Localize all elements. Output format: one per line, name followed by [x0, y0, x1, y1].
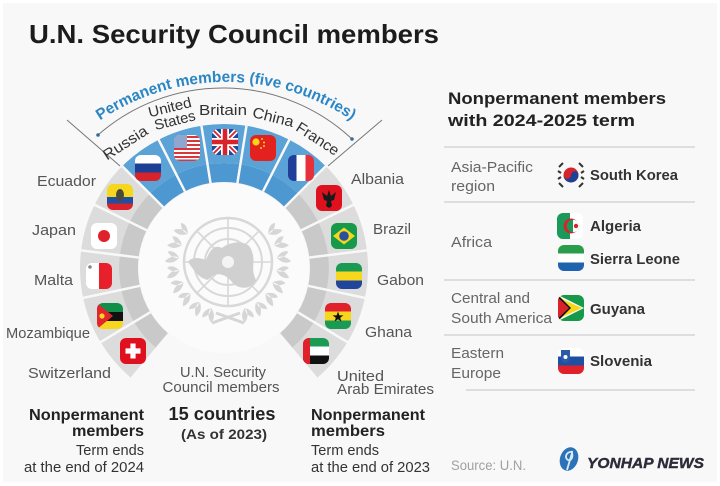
heading: table heading: Nonpermanent members: [448, 89, 666, 108]
region labels: Central and: [451, 290, 530, 307]
region labels: Asia-Pacific: [451, 159, 534, 176]
arrow: permanent members arc: [96, 88, 354, 141]
text block: right term note: Nonpermanent: [311, 407, 426, 424]
region labels: Eastern: [451, 345, 504, 362]
flag: Guyana: [558, 295, 584, 321]
label: China: China: [251, 104, 296, 131]
flag: Gabon: [336, 263, 362, 290]
permanent wedges: China: [229, 124, 290, 194]
label: France: France: [293, 119, 342, 159]
text block: left term note: members: [72, 423, 144, 440]
flag: Brazil: [331, 223, 357, 249]
labels: left nonpermanent countries: Japan: [32, 222, 76, 239]
panel: nonpermanent members table: [444, 89, 695, 390]
title: U.N. Security Council members: [29, 19, 439, 49]
text block: right term note: members: [311, 423, 385, 440]
permanent wedges: Britain: [201, 124, 247, 183]
flag: South Korea: [558, 163, 584, 187]
flag: China: [250, 135, 276, 161]
flag: Russia: [135, 155, 161, 182]
logo: Yonhap News: [557, 445, 704, 473]
heading: permanent members: Permanent members (five countries): [95, 70, 356, 122]
nonpermanent wedges: right group: [273, 165, 369, 380]
region labels: Africa: [451, 234, 493, 251]
source note: Source: U.N.: [451, 458, 526, 473]
text block: left term note: Nonpermanent: [29, 407, 145, 424]
country names: Slovenia: [590, 353, 653, 370]
country names: South Korea: [590, 167, 679, 184]
flag: Ecuador: [107, 184, 133, 210]
text block: right term note: Term ends: [311, 443, 379, 459]
flag: Mozambique: [97, 303, 123, 329]
text block: center caption: (As of 2023): [181, 426, 267, 442]
region labels: South America: [451, 310, 553, 327]
flag: United States: [174, 135, 200, 161]
labels: left nonpermanent countries: [6, 173, 111, 382]
labels: left nonpermanent countries: Malta: [34, 272, 74, 289]
permanent wedges: United States: [158, 124, 219, 194]
flag: United Arab Emirates: [303, 338, 329, 364]
text block: left term note: [24, 407, 145, 476]
flag: Ghana: [325, 303, 351, 330]
text block: center caption: Council members: [162, 380, 280, 396]
labels: right nonpermanent countries: Gabon: [377, 272, 424, 289]
logo: Yonhap News: YONHAP NEWS: [587, 455, 704, 472]
label: United States: United: [147, 95, 193, 121]
text block: center caption: 15 countries: [168, 404, 276, 424]
panel: semicircle chart: [6, 70, 434, 398]
text block: left term note: Term ends: [76, 443, 144, 459]
nonpermanent wedges: left group: [79, 165, 175, 380]
flag: Algeria: [557, 213, 580, 239]
country names: Algeria: [590, 218, 642, 235]
flag: Sierra Leone: [558, 245, 584, 272]
region labels: Europe: [451, 365, 501, 382]
labels: right nonpermanent countries: Arab Emirates: [337, 381, 434, 398]
white inner disc: [139, 183, 309, 353]
text block: right term note: at the end of 2023: [311, 460, 430, 476]
flag: Britain: [212, 129, 238, 155]
labels: left nonpermanent countries: Ecuador: [37, 173, 96, 190]
heading: table heading: [447, 89, 666, 130]
icon: UN emblem: [165, 218, 291, 323]
divider lines from chart: [67, 120, 382, 166]
text block: center caption: [162, 365, 280, 442]
labels: left nonpermanent countries: Switzerland: [28, 365, 111, 382]
region labels: region: [451, 178, 495, 195]
labels: left nonpermanent countries: Mozambique: [6, 325, 90, 342]
country names: Guyana: [590, 301, 646, 318]
region labels: [451, 159, 553, 382]
permanent wedges: France: [256, 138, 327, 213]
country names: Sierra Leone: [590, 251, 680, 268]
label: United States: [147, 95, 197, 134]
labels: right nonpermanent countries: Albania: [351, 171, 405, 188]
flag: France: [288, 155, 314, 181]
country names: [590, 167, 680, 370]
text block: right term note: [311, 407, 430, 476]
labels: right nonpermanent countries: Brazil: [373, 221, 411, 238]
labels: right nonpermanent countries: Ghana: [365, 324, 413, 341]
label: United States: States: [153, 108, 197, 134]
flag: Albania: [316, 185, 342, 211]
flag: Switzerland: [120, 338, 146, 364]
text block: center caption: U.N. Security: [180, 365, 267, 381]
label: Britain: Britain: [199, 102, 247, 119]
labels: right nonpermanent countries: United: [337, 368, 384, 385]
flag: Slovenia: [558, 348, 584, 374]
text block: left term note: at the end of 2024: [24, 460, 144, 476]
heading: table heading: with 2024-2025 term: [447, 111, 635, 130]
permanent wedges: Russia: [121, 138, 192, 213]
label: Russia: Russia: [100, 122, 152, 164]
flag: Japan: [91, 223, 117, 249]
labels: right nonpermanent countries: [337, 171, 434, 398]
flag: Malta: [86, 263, 112, 289]
